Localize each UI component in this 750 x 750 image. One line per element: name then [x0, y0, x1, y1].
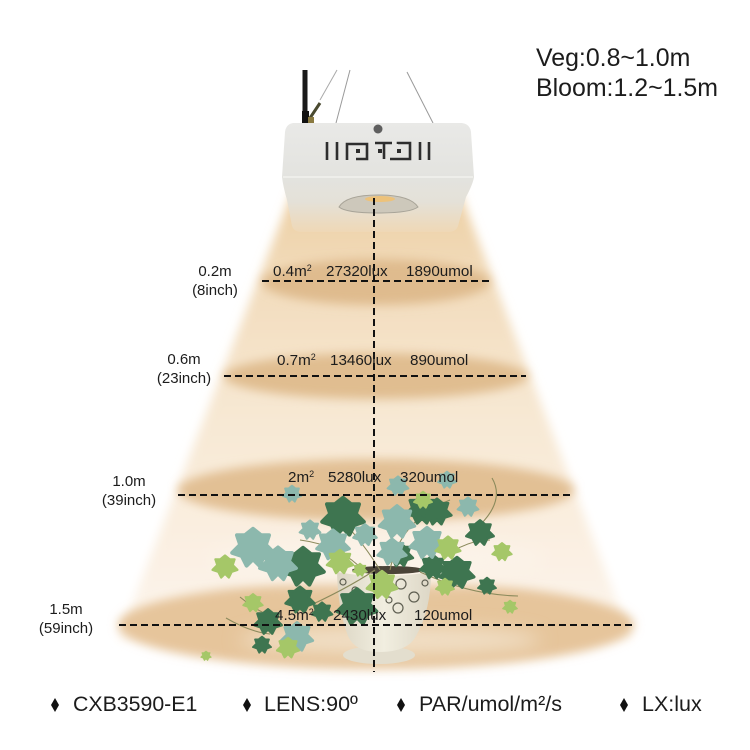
distance label: 0.6m: 0.6m [167, 351, 201, 368]
leaves: teal [232, 472, 478, 650]
readings: 1.5m [275, 607, 472, 624]
light pool: 1.0m [178, 459, 574, 521]
leaves: dark green [253, 496, 496, 653]
hanging height note: Bloom:1.2~1.5m [536, 74, 718, 102]
readings: 0.6m: 2 [311, 352, 316, 362]
leaves: light green [201, 492, 517, 660]
distance label: 1.5m: 1.5m [49, 601, 83, 618]
distance label: 0.6m [157, 351, 211, 387]
readings: 0.2m: 1890umol [406, 263, 473, 280]
hanging wires and power cable [302, 70, 433, 123]
light pool: 1.5m [118, 581, 634, 669]
pot [337, 572, 431, 652]
readings: 1.0m [288, 469, 458, 486]
readings: 0.2m [273, 263, 473, 280]
dashed line: 0.6m [224, 375, 526, 377]
distance label: 1.0m: 1.0m [112, 473, 146, 490]
light beam [118, 190, 632, 640]
distance label: 1.0m: (39inch) [102, 492, 156, 509]
distance label: 1.0m [102, 473, 156, 509]
LED lamp housing [282, 123, 474, 232]
hanging height note [536, 44, 718, 102]
hanging height note: Veg:0.8~1.0m [536, 44, 690, 72]
legend: LX: LX:lux [642, 692, 702, 716]
pot saucer [343, 646, 415, 664]
readings: 0.6m [277, 352, 468, 369]
readings: 0.2m: 0.4m [273, 263, 307, 280]
readings: 1.5m: 120umol [414, 607, 472, 624]
readings: 0.2m: 27320lux [326, 263, 388, 280]
inner highlight: area behind plant [206, 538, 546, 582]
light pool: 0.2m [262, 259, 490, 305]
inner highlight: 1.5m pool [240, 626, 540, 654]
COB chip [365, 196, 395, 202]
vent pattern [327, 142, 429, 160]
dashed line: 0.2m [262, 280, 492, 282]
lens [339, 195, 418, 213]
light pool: 0.6m [224, 353, 528, 399]
readings: 1.0m: 2m [288, 469, 309, 486]
distance label: 0.2m: 0.2m [198, 263, 232, 280]
legend: lens: LENS:90º [264, 692, 358, 716]
readings: 0.2m: 2 [307, 263, 312, 273]
legend: chip: CXB3590-E1 [73, 692, 197, 716]
soil [352, 566, 424, 574]
distance label: 0.6m: (23inch) [157, 370, 211, 387]
legend: PAR: PAR/umol/m²/s [419, 692, 562, 716]
plant [201, 472, 518, 664]
distance label: 0.2m [192, 263, 238, 299]
dashed line: 1.0m [178, 494, 572, 496]
dashed line: 1.5m [119, 624, 632, 626]
pot pattern [340, 579, 428, 613]
readings: 1.0m: 5280lux [328, 469, 382, 486]
readings: 1.5m: 4.5m [275, 607, 309, 624]
readings: 0.6m: 13460lux [330, 352, 392, 369]
distance label: 1.5m [39, 601, 93, 637]
readings: 0.6m: 0.7m [277, 352, 311, 369]
distance label: 0.2m: (8inch) [192, 282, 238, 299]
readings: 1.5m: 2 [309, 607, 314, 617]
icon: mounting screw [374, 124, 382, 134]
readings: 1.5m: 2430lux [333, 607, 387, 624]
readings: 0.6m: 890umol [410, 352, 468, 369]
readings: 1.0m: 320umol [400, 469, 458, 486]
distance label: 1.5m: (59inch) [39, 620, 93, 637]
stems [226, 478, 518, 634]
readings: 1.0m: 2 [309, 469, 314, 479]
centre axis dashed line [373, 198, 375, 672]
